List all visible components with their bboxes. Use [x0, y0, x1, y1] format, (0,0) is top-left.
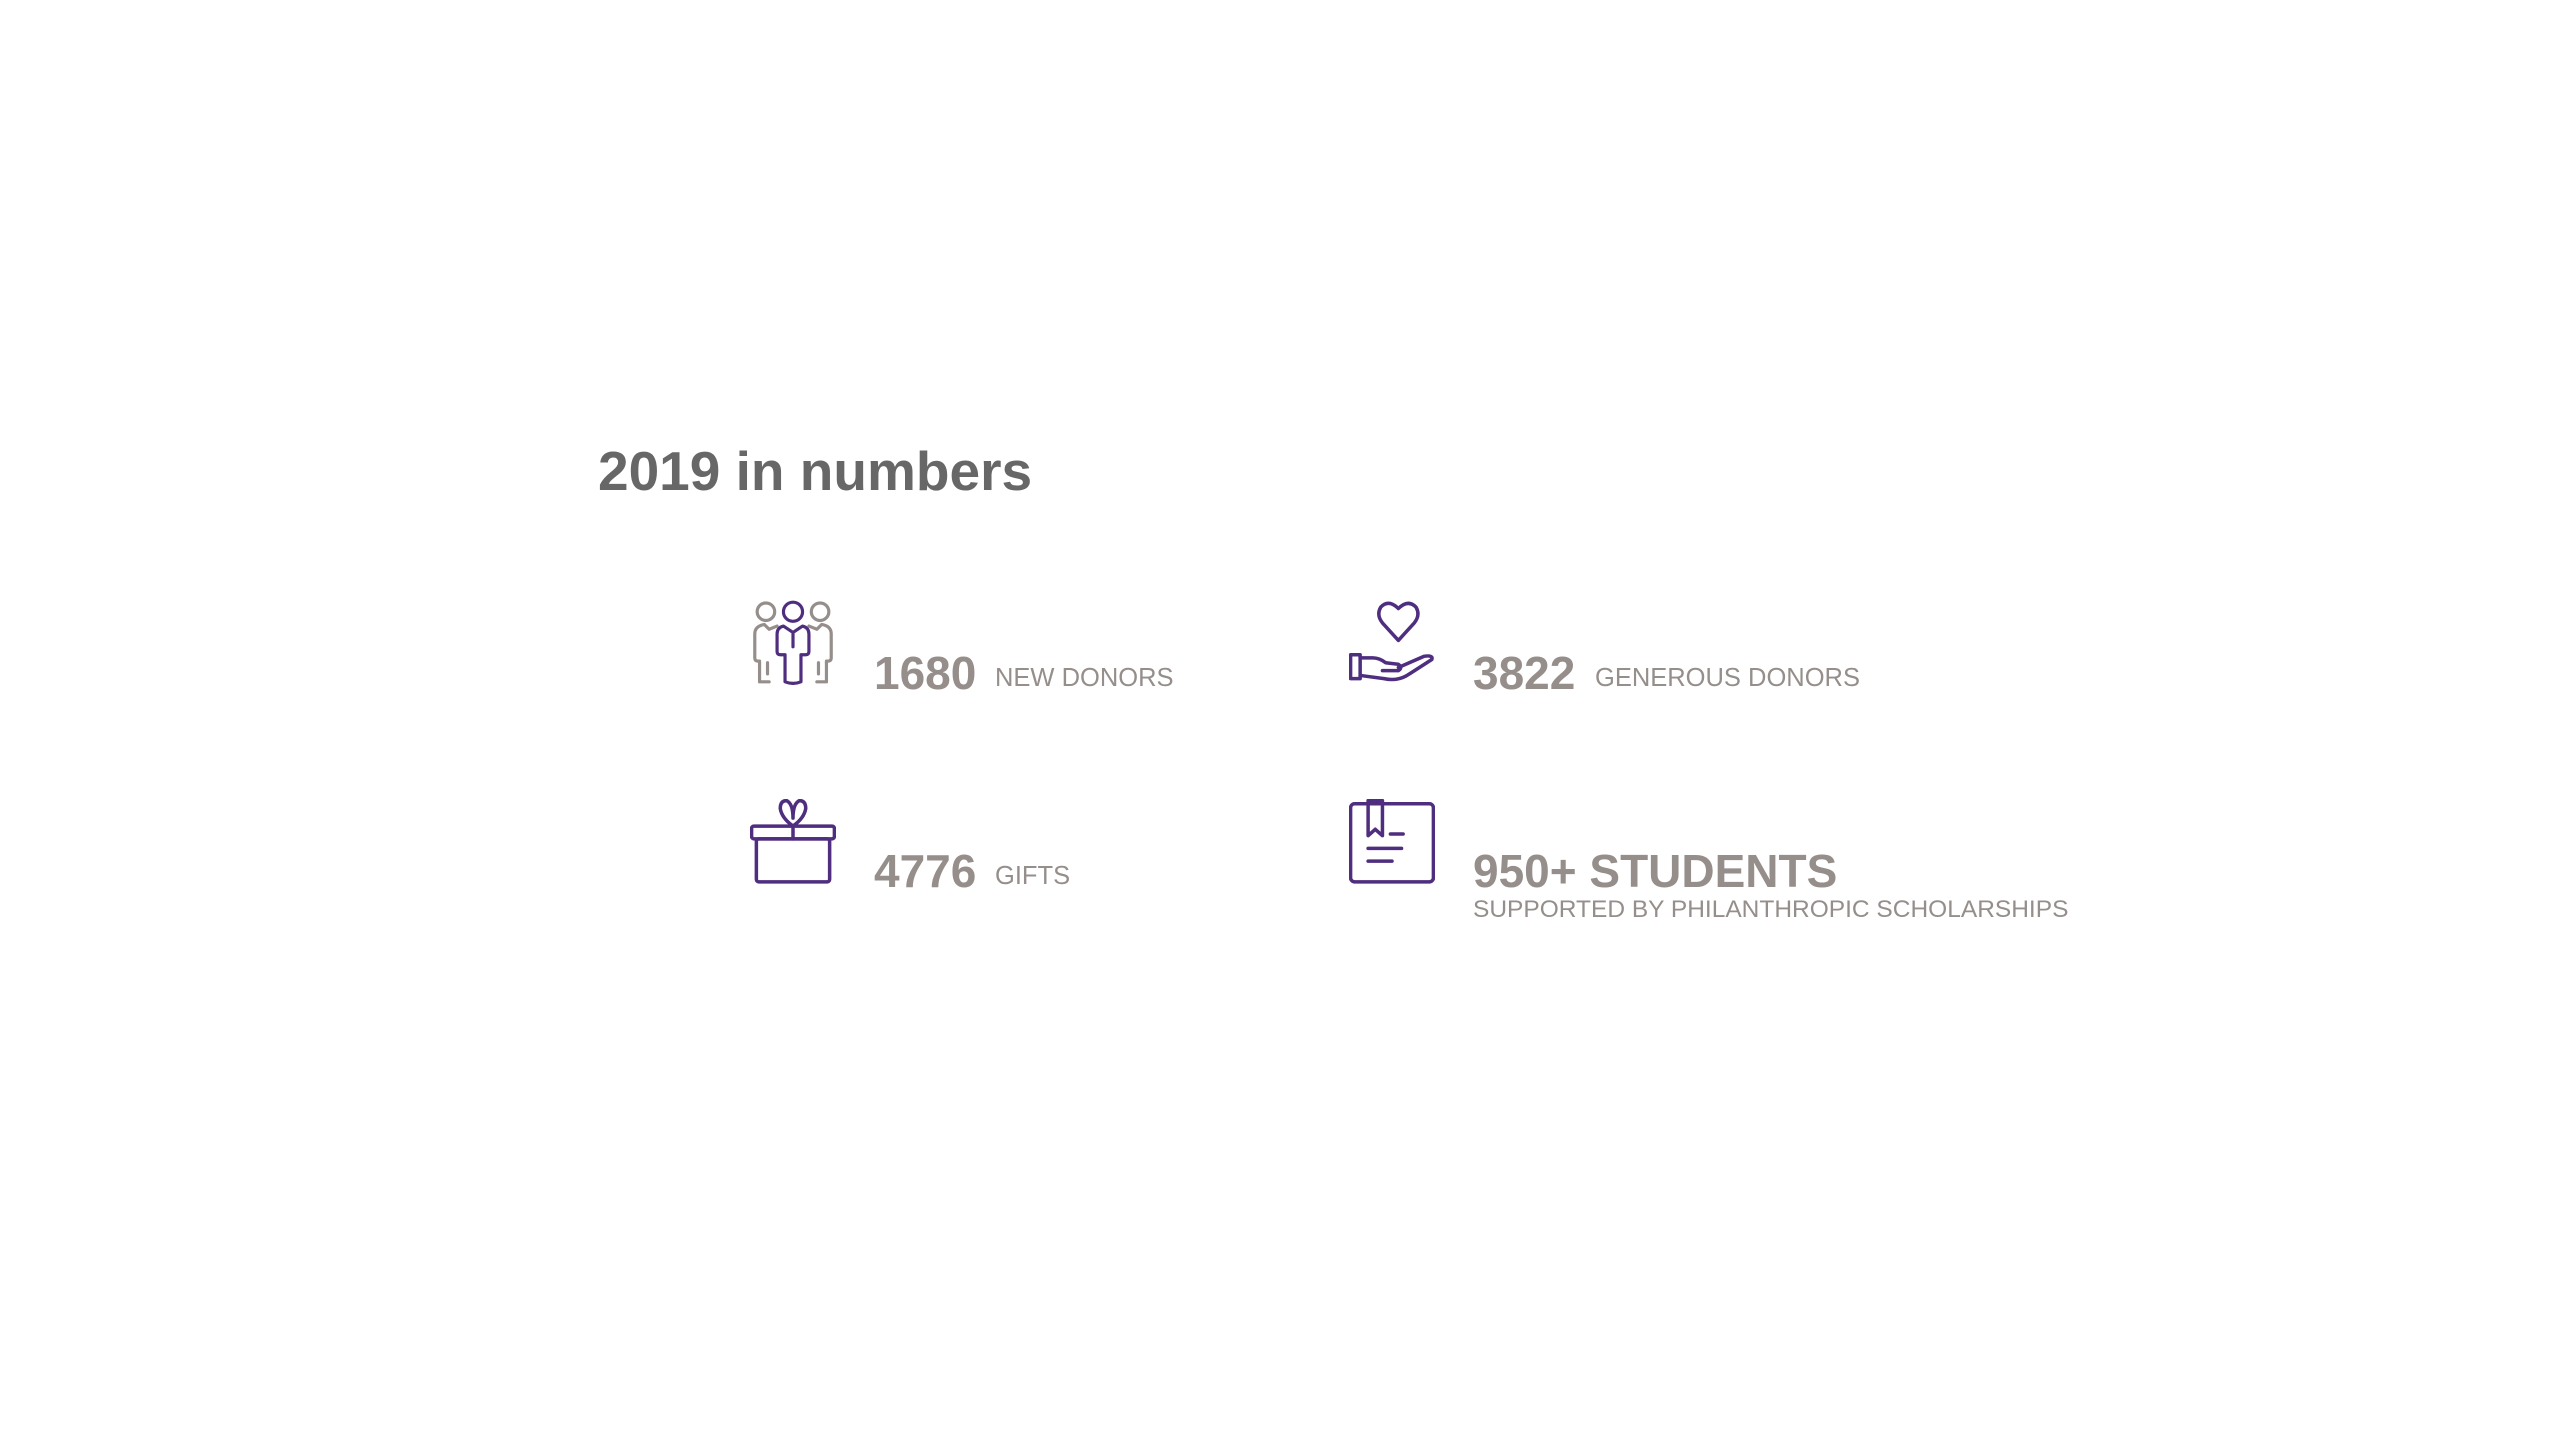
stat: new donors	[753, 600, 1174, 699]
title: 2019 in numbers	[598, 440, 1032, 502]
number: 4776	[874, 845, 976, 897]
stat: gifts	[750, 799, 1070, 897]
number and heading: 950+ STUDENTS	[1473, 845, 1837, 897]
stat: generous donors	[1349, 602, 1860, 699]
label: NEW DONORS	[995, 664, 1174, 692]
label: GENEROUS DONORS	[1595, 664, 1860, 692]
icon: heart in hand	[1349, 602, 1434, 682]
label: SUPPORTED BY PHILANTHROPIC SCHOLARSHIPS	[1473, 896, 2068, 923]
icon: people	[753, 600, 833, 685]
number: 1680	[874, 647, 976, 699]
icon: book	[1349, 799, 1435, 884]
stat: students	[1349, 799, 2068, 923]
icon: gift	[750, 799, 836, 884]
number: 3822	[1473, 647, 1575, 699]
label: GIFTS	[995, 862, 1070, 890]
